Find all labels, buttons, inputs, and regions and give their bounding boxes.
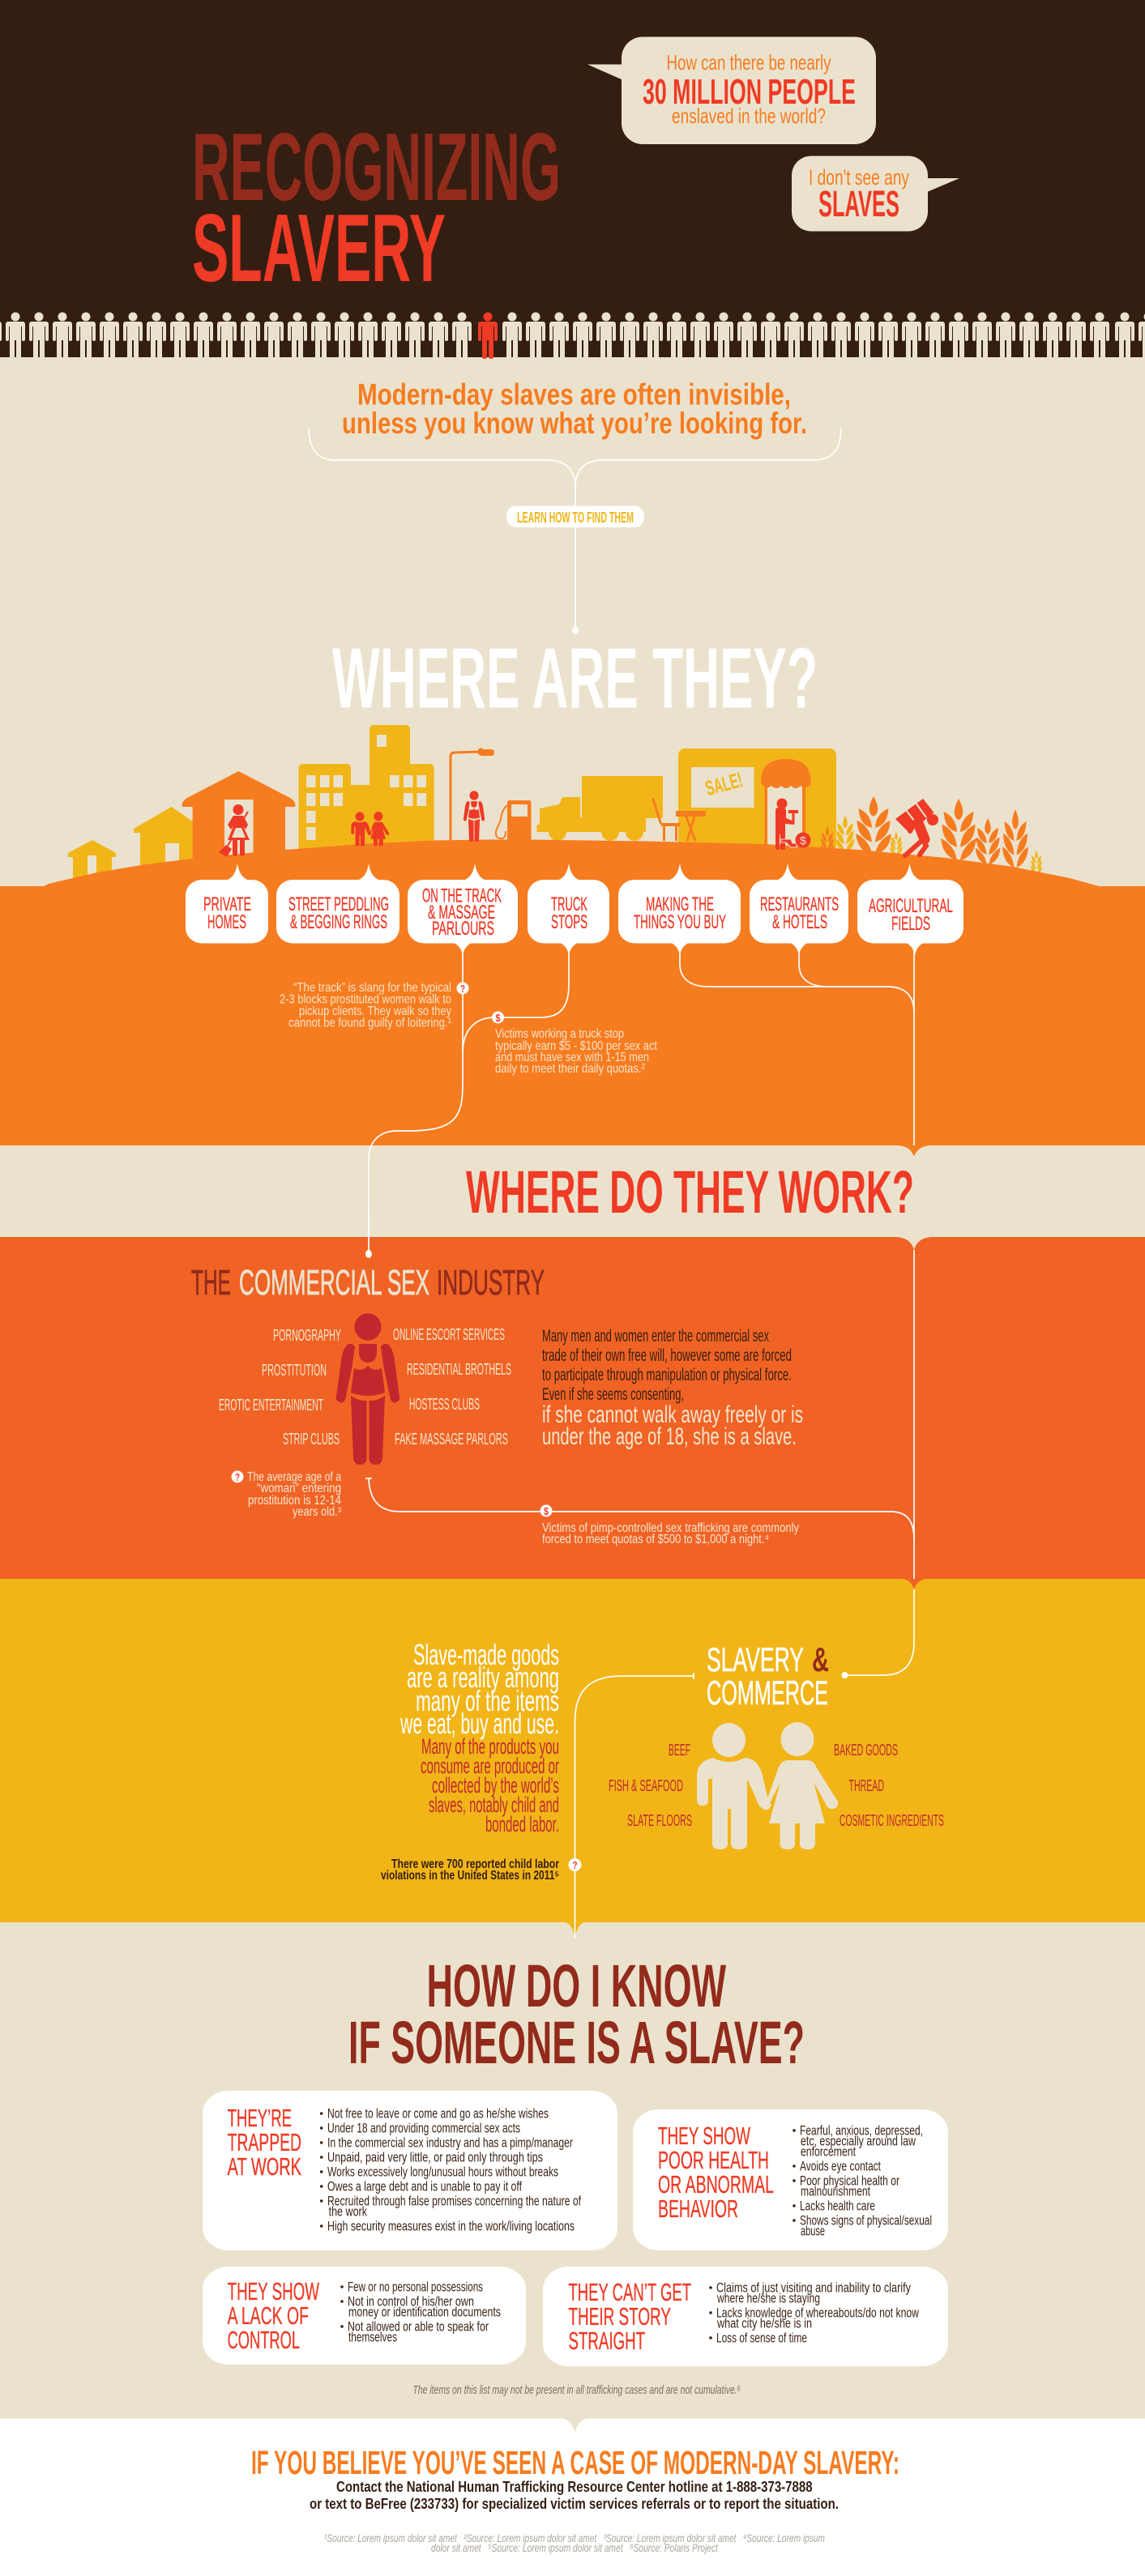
card list: where he/she is staying [716,2291,820,2305]
icon: maid figure [219,804,250,857]
connector lines [365,1215,914,1642]
pill: agricultural fields: FIELDS [891,913,930,935]
labels: industry types: STRIP CLUBS [283,1431,340,1448]
note: truck stop earnings [495,1027,657,1076]
icon: dollar sign: $ [544,1505,549,1517]
icon: two children [351,812,389,846]
sources [324,2531,825,2554]
pill: truck stops [528,880,609,943]
pill: making the things you buy [618,880,741,943]
card list: what city he/she is in [716,2315,812,2331]
panel: where are they scene [0,725,1145,1258]
card list: Lacks knowledge of whereabouts/do not know [716,2305,920,2320]
panel: commercial sex industry [0,1215,1145,1642]
text block: consent paragraph: if she cannot walk away freely or is [542,1401,803,1428]
note: average age: “woman” entering [257,1482,341,1495]
icon: question mark: ? [460,983,465,995]
card: lack of control [203,2267,526,2365]
card list [340,2280,501,2344]
button: learn how to find them: LEARN HOW TO FIND THEM [517,510,634,526]
card heading [658,2122,774,2223]
text block: slave-made goods: are a reality among [407,1661,559,1694]
card list: Not in control of his/her own [348,2294,474,2309]
card list [709,2280,920,2346]
heading [707,1640,829,1712]
icon: dollar sign [492,1011,504,1024]
note: average age: years old.³ [293,1505,341,1519]
card list [793,2122,932,2239]
pill: truck stops: STOPS [551,911,587,933]
heading: THE [191,1263,231,1303]
title: SLAVERY [192,194,446,302]
labels: goods: BEEF [669,1742,690,1759]
hill [0,839,1145,1145]
card list: the work [329,2203,367,2220]
card list: etc, especially around law [801,2134,916,2148]
card heading: CONTROL [228,2326,300,2354]
card heading [228,2277,319,2354]
heading: COMMERCIAL SEX [239,1263,429,1303]
card heading: BEHAVIOR [658,2194,738,2223]
card heading: THEY SHOW [658,2122,750,2150]
labels: industry types [219,1326,511,1448]
hotline text [310,2478,839,2512]
note: child labor: There were 700 reported child labor [391,1857,559,1871]
heading: INDUSTRY [437,1263,545,1303]
connector lines [365,943,914,1258]
card list: Few or no personal possessions [348,2280,483,2294]
icon: worker carrying load [895,799,938,855]
pill: truck stops: TRUCK [551,893,587,915]
illustration: cafe chair and table [653,799,706,841]
sources: ¹Source: Lorem ipsum dolor sit amet ²Source: Lorem ipsum dolor sit amet ³Source: Lorem ipsum dolor sit amet ⁴Source: Lorem ipsum [324,2531,825,2544]
text block: slave-made goods: Slave-made goods [413,1638,559,1671]
speech bubble: 30 million people: How can there be nearly [666,50,831,75]
icon: woman in bikini [464,791,485,842]
labels: industry types: PROSTITUTION [262,1362,327,1380]
labels: goods: SLATE FLOORS [627,1812,692,1830]
pill: on the track: PARLOURS [432,918,494,940]
note: truck stop earnings: typically earn $5 - $100 per sex act [495,1039,657,1053]
card heading [569,2278,691,2355]
text block: products: slaves, notably child and [429,1793,559,1817]
note: quotas: Victims of pimp-controlled sex trafficking are commonly [542,1521,799,1535]
labels: goods [609,1742,944,1830]
panel: header [0,0,1145,359]
connector: bracket to where are they [309,428,841,633]
icon: dollar sign [540,1505,553,1517]
text block: slave-made goods: many of the items [416,1684,559,1717]
panel: slavery and commerce [0,1579,1145,1938]
card: poor health [633,2109,948,2250]
note: quotas: forced to meet quotas of $500 to $1,000 a night.⁴ [542,1533,769,1546]
card list [320,2106,581,2234]
card list: money or identification documents [348,2304,501,2320]
row of people icons [0,313,1145,359]
labels: goods: COSMETIC INGREDIENTS [840,1812,944,1830]
card heading [228,2104,301,2181]
heading: & [812,1640,829,1678]
speech bubble: slaves [792,156,959,232]
text block: products: collected by the world’s [432,1773,559,1798]
heading: SLAVERY [707,1640,804,1678]
card list: abuse [801,2223,825,2239]
pill: street peddling: & BEGGING RINGS [290,911,387,933]
icon: couple [697,1722,838,1849]
text block: consent paragraph: trade of their own free will, however some are forced [542,1346,792,1365]
card heading: THEY’RE [228,2104,292,2132]
card list: Works excessively long/unusual hours without breaks [327,2164,558,2179]
illustration: street lamp and gas pump [451,748,532,842]
card: trapped at work [203,2091,617,2250]
text block: products: Many of the products you [421,1734,559,1759]
icon: female figure [336,1313,399,1465]
text block: products: bonded labor. [485,1812,559,1836]
intro text: unless you know what you’re looking for. [342,407,807,440]
labels: goods: FISH & SEAFOOD [609,1777,683,1795]
heading: how do I know: IF SOMEONE IS A SLAVE? [348,2009,805,2076]
pill: restaurants and hotels [750,880,848,943]
icon: question mark: ? [572,1859,578,1871]
disclaimer: The items on this list may not be present in all trafficking cases and are not cumulative.⁶ [413,2383,741,2397]
tail: orange into beige [898,1145,930,1157]
connector lines [575,1589,914,1938]
text block: consent paragraph: Even if she seems consenting, [542,1385,684,1404]
note: average age: The average age of a [247,1470,341,1484]
note: the track: “The track” is slang for the typical [293,981,451,995]
sources: dolor sit amet ⁵Source: Lorem ipsum dolor sit amet ⁶Source: Polaris Project [431,2541,719,2554]
labels: industry types: EROTIC ENTERTAINMENT [219,1397,323,1414]
labels: industry types: PORNOGRAPHY [273,1327,341,1345]
pill: on the track: ON THE TRACK [422,885,502,907]
icon: question mark [232,1471,243,1483]
card heading: THEY CAN’T GET [569,2278,691,2306]
pill: agricultural fields [857,880,963,943]
pill: on the track: & MASSAGE [428,902,495,923]
text block: products [421,1734,559,1836]
card list: themselves [348,2330,397,2344]
icon: dollar sign: $ [496,1012,501,1024]
labels: goods: BAKED GOODS [834,1742,898,1759]
illustration: wheat field [821,796,1042,875]
card list: Recruited through false promises concerning the nature of [327,2194,581,2208]
note: child labor: violations in the United States in 2011⁵ [381,1869,559,1883]
pill: restaurants and hotels: & HOTELS [772,911,827,933]
card heading: POOR HEALTH [658,2146,769,2174]
card list: Lacks health care [800,2199,875,2213]
note: truck stop earnings: and must have sex with 1-15 men [495,1051,649,1064]
labels: industry types: FAKE MASSAGE PARLORS [395,1431,508,1448]
illustration: truck [536,776,663,841]
card list: Shows signs of physical/sexual [800,2213,932,2228]
card list: Owes a large debt and is unable to pay it off [327,2179,522,2194]
card: story straight [543,2267,948,2366]
intro text [342,377,807,440]
card list: In the commercial sex industry and has a pimp/manager [327,2135,573,2150]
note: average age: prostitution is 12-14 [248,1494,341,1508]
note: the track [280,981,451,1030]
note: the track: pickup clients. They walk so they [299,1004,451,1018]
pill: on the track [408,880,518,943]
panel: call to action [0,2418,1145,2576]
icon: man with hammer [775,799,810,850]
location pills [186,864,963,955]
speech bubble: 30 million people: enslaved in the world? [672,104,826,128]
card list: Not allowed or able to speak for [348,2318,489,2335]
speech bubble: slaves: I don't see any [809,165,909,190]
speech bubble: slaves: SLAVES [818,183,899,224]
card list: malnourishment [801,2184,870,2199]
card heading: STRAIGHT [569,2327,645,2355]
illustration: shop with sale sign [678,748,836,854]
card list: Under 18 and providing commercial sex acts [327,2121,520,2135]
title: RECOGNIZING [192,113,561,221]
icon: man with hammer: $ [800,834,806,847]
card heading: A LACK OF [228,2301,309,2330]
pill: making the things you buy: THINGS YOU BUY [634,911,726,933]
card list: Not free to leave or come and go as he/she wishes [327,2106,549,2121]
card list: enforcement [801,2143,856,2160]
title [192,113,561,302]
text block: products: consume are produced or [421,1754,559,1778]
card heading: AT WORK [228,2152,301,2181]
card heading: THEY SHOW [228,2277,319,2305]
text block: slave-made goods [399,1638,559,1740]
pill: private homes: HOMES [207,911,246,933]
hotline text: or text to BeFree (233733) for specialized victim services referrals or to report the situation. [310,2495,839,2512]
icon: question mark: ? [235,1471,240,1483]
heading: how do I know [348,1952,805,2076]
pill: street peddling: STREET PEDDLING [288,893,389,915]
icon: question mark [457,982,468,995]
speech bubble: 30 million people: 30 MILLION PEOPLE [643,72,856,112]
button: learn how to find them [506,505,644,527]
icon: question mark [569,1858,582,1871]
text block: consent paragraph: Many men and women enter the commercial sex [542,1327,769,1346]
note: average age [247,1470,341,1519]
note: quotas [542,1521,799,1546]
note: the track: cannot be found guilty of loitering.¹ [288,1016,451,1030]
hotline text: Contact the National Human Trafficking Resource Center hotline at 1-888-373-7888 [336,2478,813,2495]
text block: consent paragraph: under the age of 18, she is a slave. [542,1423,797,1450]
note: truck stop earnings: daily to meet their daily quotas.² [495,1062,646,1076]
pill: street peddling [276,880,399,943]
speech bubble: 30 million people [587,37,876,144]
text block: consent paragraph [542,1327,803,1450]
card list: Avoids eye contact [800,2158,881,2174]
heading: COMMERCE [707,1674,828,1712]
card list: Unpaid, paid very little, or paid only through tips [327,2150,543,2164]
heading: where are they: WHERE ARE THEY? [332,630,818,726]
labels: industry types: ONLINE ESCORT SERVICES [393,1326,505,1344]
card heading: TRAPPED [228,2128,301,2156]
heading: how do I know: HOW DO I KNOW [426,1952,726,2019]
text block: consent paragraph: to participate through manipulation or physical force. [542,1366,792,1384]
note: truck stop earnings: Victims working a truck stop [495,1027,624,1041]
icon: red highlighted person [478,313,498,359]
pill: restaurants and hotels: RESTAURANTS [760,893,839,915]
pill: private homes: PRIVATE [203,893,251,915]
card list: High security measures exist in the work/living locations [327,2218,575,2234]
card heading: OR ABNORMAL [658,2170,774,2199]
illustration: shop with sale sign: SALE! [703,767,745,800]
card list: Fearful, anxious, depressed, [800,2122,923,2139]
text block: slave-made goods: we eat, buy and use. [399,1707,559,1740]
labels: industry types: RESIDENTIAL BROTHELS [407,1361,511,1379]
labels: industry types: HOSTESS CLUBS [409,1396,480,1414]
pill: making the things you buy: MAKING THE [646,893,714,915]
card list: Claims of just visiting and inability to clarify [716,2280,911,2296]
card list: Poor physical health or [800,2173,899,2189]
card list: Loss of sense of time [716,2330,807,2346]
pill: private homes [186,880,268,943]
pill: agricultural fields: AGRICULTURAL [869,895,953,917]
note: child labor [381,1857,559,1883]
note: the track: 2-3 blocks prostituted women walk to [280,993,451,1006]
labels: goods: THREAD [849,1777,884,1795]
illustration: town buildings [68,725,434,883]
intro text: Modern-day slaves are often invisible, [357,377,791,412]
card heading: THEIR STORY [569,2302,671,2331]
